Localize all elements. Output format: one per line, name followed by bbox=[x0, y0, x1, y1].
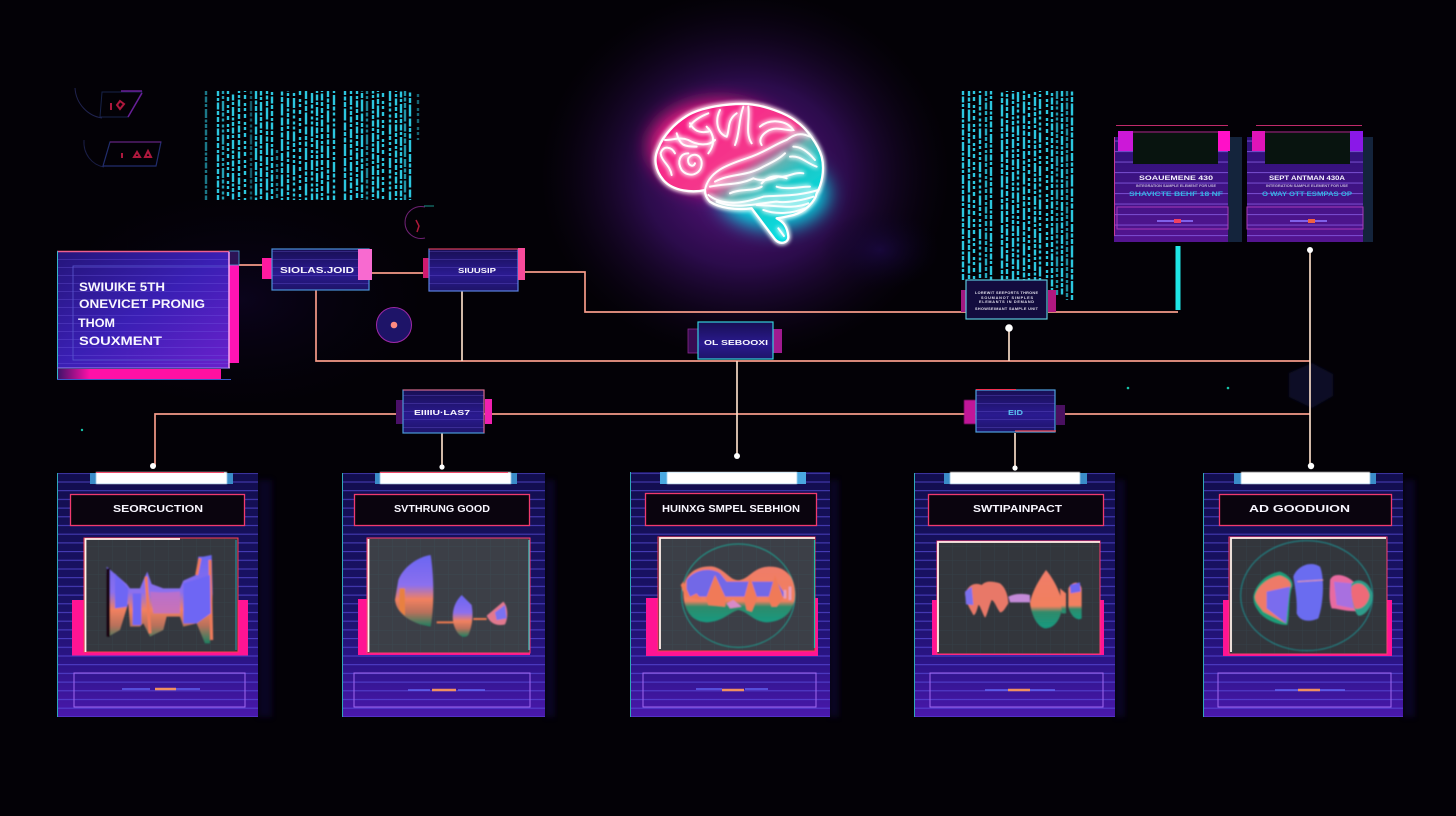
text: INTEGRATION SAMPLE ELEMENT FOR USE bbox=[1136, 183, 1216, 188]
lower box bbox=[1117, 207, 1228, 229]
panel: main text card bbox=[57, 251, 239, 380]
icon: small display top left bbox=[84, 140, 161, 167]
panel: top right card 2: SEPT ANTMAN 430A bbox=[1269, 176, 1346, 182]
text: SHAVICTE BEHF 18 NF bbox=[1129, 192, 1223, 198]
title box: SEORCUCTION bbox=[113, 504, 203, 515]
text: SOAUEMENE 430 bbox=[1139, 176, 1214, 182]
panel: card 2 bbox=[342, 472, 555, 717]
top rule bbox=[1116, 124, 1228, 126]
brain body bbox=[656, 104, 823, 243]
pink bottom band bbox=[57, 369, 221, 379]
connector lines bbox=[150, 247, 1314, 471]
node: lower left bbox=[396, 390, 492, 433]
side band bbox=[1228, 137, 1242, 242]
node: top middle bbox=[423, 248, 525, 291]
panel: card 2: SVTHRUNG GOOD bbox=[394, 504, 490, 515]
node: lower left: EIIIIU·LAS7 bbox=[414, 408, 470, 417]
text bbox=[1129, 176, 1223, 198]
waveform panel bbox=[72, 538, 248, 656]
neon brain bbox=[650, 102, 828, 243]
panel: card 5: AD GOODUION bbox=[1249, 504, 1350, 515]
waveform bbox=[395, 555, 507, 637]
dark screen bbox=[1133, 133, 1218, 164]
waveform bbox=[1241, 541, 1373, 651]
panel: card 3 bbox=[630, 472, 839, 717]
panel: top right card 2: INTEGRATION SAMPLE ELEMENT FOR USE bbox=[1266, 183, 1348, 188]
card heading: THOM bbox=[78, 316, 115, 330]
node: center: OL SEBOOXI bbox=[704, 338, 768, 347]
panel: card 4 bbox=[914, 472, 1125, 717]
matrix code panel left bbox=[206, 91, 418, 200]
panel: top right card 2: O WAY OTT ESMPAS OP bbox=[1262, 192, 1352, 198]
card heading: SWIUIKE 5TH bbox=[79, 280, 165, 294]
corner tabs bbox=[1118, 131, 1133, 151]
node: upper right: SOUMANOT SIMPLES bbox=[981, 296, 1033, 300]
icon: small gauge top left bbox=[75, 88, 142, 118]
pink side band bbox=[229, 265, 239, 363]
card heading bbox=[78, 280, 205, 348]
top light bar bbox=[90, 472, 233, 484]
card heading: ONEVICET PRONIG bbox=[79, 297, 205, 311]
node: upper right: SHOWSEIMANT SAMPLE UNIT bbox=[975, 307, 1039, 311]
icon: small dial bbox=[405, 206, 434, 238]
matrix code panel right bbox=[963, 91, 1072, 300]
node: lower right bbox=[964, 390, 1065, 432]
title box bbox=[70, 494, 244, 526]
footer box bbox=[74, 673, 245, 707]
node: upper right: LOREWIT SEEPORTS THRONE bbox=[975, 291, 1038, 295]
card heading: SOUXMENT bbox=[79, 334, 163, 348]
node: top left: SIOLAS.JOID bbox=[280, 265, 354, 275]
waveform bbox=[965, 570, 1082, 628]
node: lower right: EID bbox=[1008, 410, 1023, 417]
waveform bbox=[107, 555, 213, 643]
node: top left bbox=[262, 249, 372, 290]
brain folds bbox=[661, 107, 818, 236]
panel: top right card 2 bbox=[1247, 126, 1373, 242]
panel: top right card 1 bbox=[1114, 126, 1242, 242]
panel: card 1 bbox=[57, 472, 272, 717]
panel: card 5 bbox=[1203, 472, 1415, 717]
node: upper right: ELEMANTS IN DEMAND bbox=[979, 300, 1034, 304]
node: upper right bbox=[961, 280, 1056, 319]
card body bbox=[57, 251, 229, 368]
node: top middle: SIUUSIP bbox=[458, 266, 496, 275]
panel: card 3: HUINXG SMPEL SEBHION bbox=[662, 504, 800, 515]
brain glow bbox=[650, 102, 828, 228]
icon: target dot bbox=[376, 308, 412, 342]
cyan connector bar bbox=[1176, 246, 1180, 310]
node: center bbox=[688, 322, 782, 359]
waveform bbox=[681, 544, 795, 647]
body bbox=[1114, 137, 1228, 242]
card body bbox=[57, 473, 272, 717]
panel: card 4: SWTIPAINPACT bbox=[973, 504, 1062, 515]
